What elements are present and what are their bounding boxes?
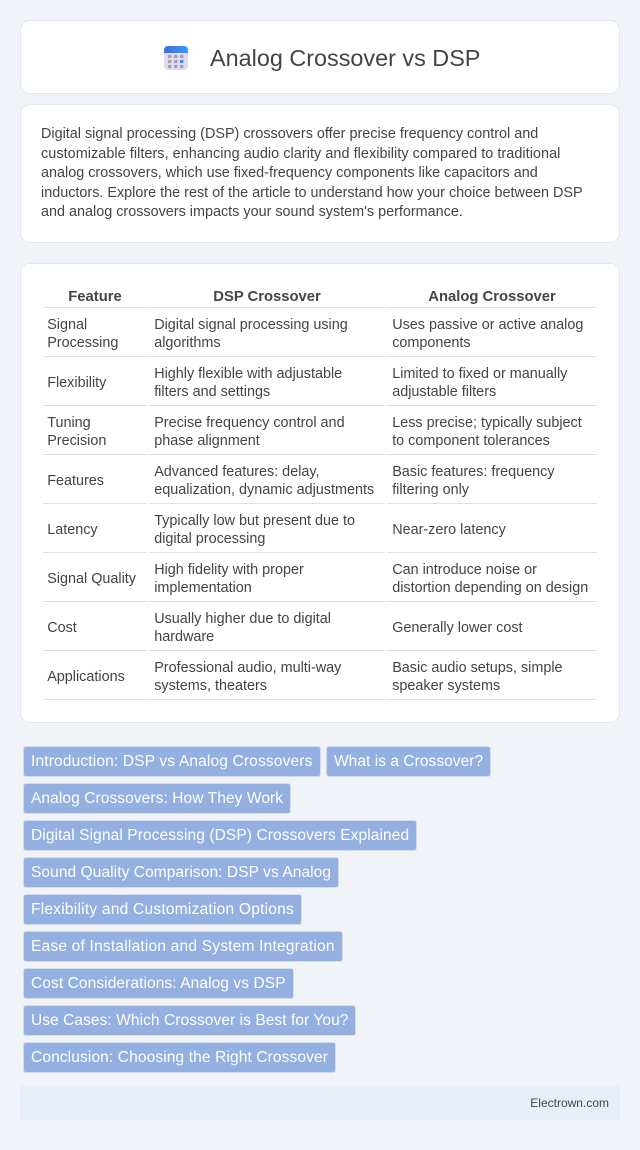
row: Signal Processing: Processing (47, 335, 118, 351)
row: Applications: systems, theaters (154, 678, 267, 694)
tag: analog crossovers (23, 783, 291, 814)
row: Signal Quality: High fidelity with proper (154, 562, 304, 578)
tag: introduction (23, 746, 320, 777)
table header row: DSP Crossover (213, 289, 321, 305)
row: Applications: Applications (47, 669, 125, 685)
panel: header (20, 20, 620, 94)
tag: what is a crossover: What is a Crossover? (334, 753, 483, 770)
row: Latency (43, 513, 597, 553)
row: Cost: Generally lower cost (392, 620, 523, 636)
row: Signal Quality: distortion depending on design (392, 580, 588, 596)
panel: introduction (20, 104, 620, 243)
row: Tuning Precision (43, 415, 597, 455)
tag: DSP crossovers explained: Digital Signal Processing (DSP) Crossovers Explained (31, 827, 409, 844)
tag: what is a crossover (326, 746, 491, 777)
tag: installation (23, 931, 343, 962)
footer credit: Electrown.com (530, 1096, 609, 1110)
tag: use cases: Use Cases: Which Crossover is Best for You? (31, 1012, 348, 1029)
row: Signal Processing: Uses passive or active analog (392, 317, 583, 333)
row: Features: Advanced features: delay, (154, 464, 320, 480)
tag: conclusion (23, 1042, 336, 1073)
row: Flexibility: filters and settings (154, 384, 270, 400)
row: Applications: speaker systems (392, 678, 500, 694)
row: Latency: Typically low but present due to (154, 513, 355, 529)
tag: cost (23, 968, 294, 999)
row: Tuning Precision: to component tolerances (392, 433, 550, 449)
row: Signal Processing (43, 317, 597, 357)
row: Cost: Cost (47, 620, 77, 636)
row: Signal Processing: algorithms (154, 335, 221, 351)
table header row: Feature (68, 289, 122, 305)
tag: DSP crossovers explained (23, 820, 417, 851)
row: Features (43, 464, 597, 504)
row: Signal Processing: Signal (47, 317, 87, 333)
row: Tuning Precision: phase alignment (154, 433, 260, 449)
tag: installation: Ease of Installation and System Integration (31, 938, 335, 955)
row: Tuning Precision: Precise frequency control and (154, 415, 345, 431)
row: Applications: Basic audio setups, simple (392, 660, 563, 676)
tag: conclusion: Conclusion: Choosing the Right Crossover (31, 1049, 328, 1066)
row: Flexibility: adjustable filters (392, 384, 496, 400)
tag: analog crossovers: Analog Crossovers: How They Work (31, 790, 283, 807)
row: Applications (43, 660, 597, 700)
row: Cost (43, 611, 597, 651)
row: Cost: hardware (154, 629, 214, 645)
table header row (43, 289, 597, 308)
row: Latency: Latency (47, 522, 98, 538)
icon: calendar grid (164, 46, 188, 70)
tag: flexibility (23, 894, 302, 925)
footer (20, 1086, 620, 1120)
row: Signal Processing: Digital signal processing using (154, 317, 348, 333)
row: Features: filtering only (392, 482, 469, 498)
row: Signal Quality: implementation (154, 580, 252, 596)
row: Features: Basic features: frequency (392, 464, 555, 480)
row: Tuning Precision: Tuning (47, 415, 91, 431)
row: Tuning Precision: Precision (47, 433, 106, 449)
row: Applications: Professional audio, multi-way (154, 660, 341, 676)
row: Tuning Precision: Less precise; typically subject (392, 415, 582, 431)
tag: sound quality (23, 857, 339, 888)
text block: introduction: customizable filters, enhancing audio clarity and flexibility compared to traditional (41, 146, 560, 162)
text block: introduction: inductors. Explore the rest of the article to understand how your choice between DSP (41, 185, 583, 201)
row: Flexibility: Highly flexible with adjustable (154, 366, 342, 382)
row: Flexibility: Flexibility (47, 375, 106, 391)
row: Features: Features (47, 473, 104, 489)
row: Flexibility: Limited to fixed or manually (392, 366, 567, 382)
row: Features: equalization, dynamic adjustments (154, 482, 374, 498)
row: Latency: Near-zero latency (392, 522, 506, 538)
table: comparison (43, 289, 597, 700)
row: Signal Processing: components (392, 335, 471, 351)
tag: use cases (23, 1005, 356, 1036)
row: Cost: Usually higher due to digital (154, 611, 331, 627)
row: Signal Quality: Signal Quality (47, 571, 136, 587)
tag: introduction: Introduction: DSP vs Analog Crossovers (31, 753, 312, 770)
row: Signal Quality (43, 562, 597, 602)
row: Latency: digital processing (154, 531, 265, 547)
row: Signal Quality: Can introduce noise or (392, 562, 537, 578)
tag: flexibility: Flexibility and Customization Options (31, 901, 294, 918)
text block: introduction: analog crossovers, which use fixed-frequency components like capacitors and (41, 165, 538, 181)
text block: introduction: and analog crossovers impacts your sound system's performance. (41, 204, 463, 220)
text block: introduction: Digital signal processing (DSP) crossovers offer precise frequency control and (41, 126, 538, 142)
table header row: Analog Crossover (428, 289, 556, 305)
tag: cost: Cost Considerations: Analog vs DSP (31, 975, 286, 992)
panel: comparison table (20, 263, 620, 723)
row: Flexibility (43, 366, 597, 406)
title: Analog Crossover vs DSP (210, 45, 480, 71)
tag: sound quality: Sound Quality Comparison: DSP vs Analog (31, 864, 331, 881)
text block: introduction (41, 126, 583, 220)
